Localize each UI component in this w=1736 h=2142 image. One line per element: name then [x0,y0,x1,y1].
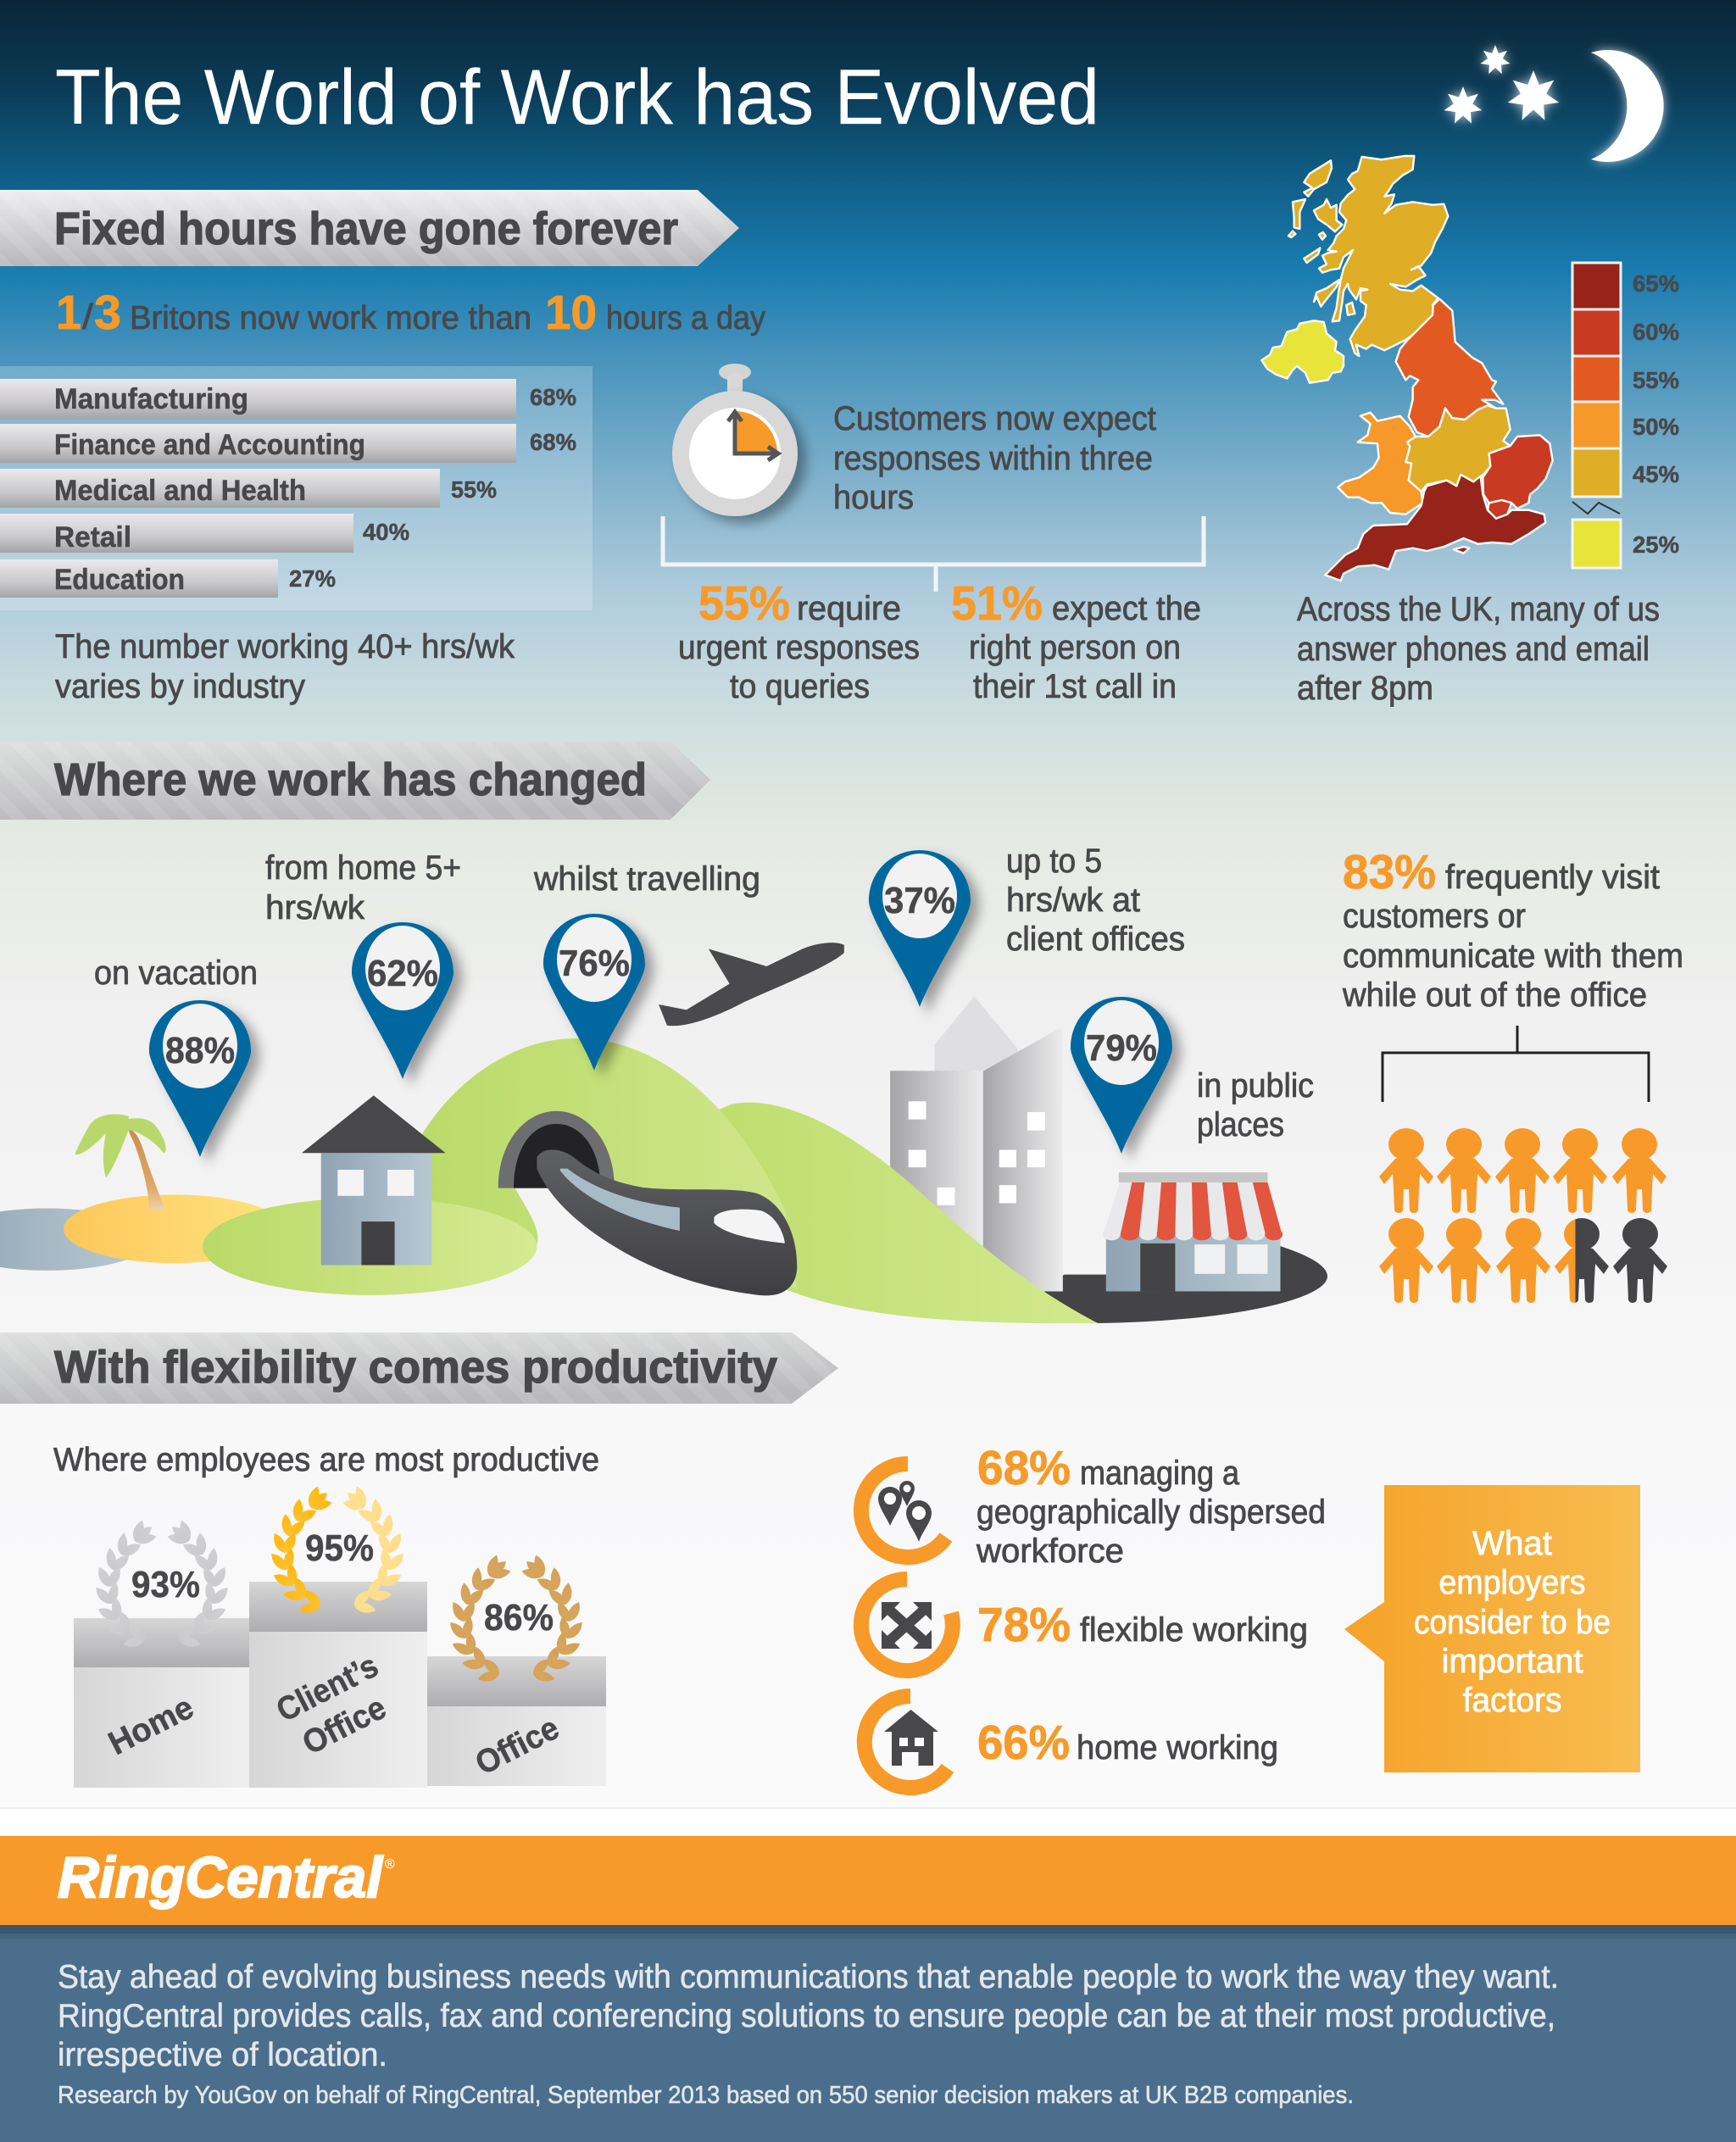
footer copy panel: Research by YouGov on behalf of RingCentral, September 2013 based on 550 senior decision makers at UK B2B companies. [58,2082,1354,2109]
factor: home working: home working [1077,1729,1278,1766]
bar: manufacturing [0,379,576,419]
stat line: one third of Britons [56,286,765,340]
text: chart caption: varies by industry [55,668,305,705]
pin: public places 79 percent: 79% [1086,1027,1157,1069]
stat: 55 percent urgent responses [678,576,920,705]
wreath: silver [92,1519,231,1649]
text: chart caption: The number working 40+ hrs/wk [55,628,515,665]
value: client's office 95 percent: 95% [305,1527,374,1569]
stat line: one third of Britons: 1 [56,286,81,340]
podium label: home: Home [103,1689,199,1762]
factor: dispersed workforce: workforce [976,1533,1124,1570]
text: customers expect: hours [833,479,914,516]
factor: dispersed workforce: geographically dispersed [976,1494,1326,1531]
footer copy panel: irrespective of location. [58,2037,387,2073]
factor: flexible working: 78% [977,1598,1071,1652]
section banner: flexibility [0,1332,838,1404]
bar: retail: Retail [54,521,131,554]
logo band: ® [385,1857,395,1872]
stat line: one third of Britons: 10 [545,286,597,340]
icon: stars and moon [1444,45,1664,162]
stat: 83 percent visit customers [1342,845,1683,1014]
footer copy panel [0,1925,1736,2142]
pictogram: ten people, eight and a half orange [1379,1128,1667,1303]
stat: 83 percent visit customers: customers or [1343,898,1526,935]
region: South of England [1325,475,1545,581]
callout: what employers consider important: factors [1463,1682,1561,1719]
label: public places: in public [1197,1067,1314,1104]
section banner: flexibility: With flexibility comes productivity [54,1342,777,1393]
stat: 83 percent visit customers: frequently visit [1445,859,1660,896]
pin: whilst travelling 76 percent [543,914,645,1071]
bar: education: 27% [289,565,336,592]
icon: ring with expanding arrows [861,1579,953,1671]
label: public places [1197,1067,1314,1143]
icon: ring with house [865,1696,948,1788]
wreath: gold [268,1485,407,1615]
region: Scotland [1288,156,1448,356]
bar: manufacturing: 68% [530,384,576,410]
pin: client offices 37 percent: 37% [884,880,955,921]
text: customers expect: Customers now expect [833,400,1156,437]
region: Northern Ireland [1261,320,1344,383]
podium label: client's office [271,1648,392,1762]
section banner: where we work [0,742,710,820]
podium label: client's office: Office [297,1689,392,1762]
callout: what employers consider important: What [1472,1525,1552,1562]
pin: whilst travelling 76 percent: 76% [559,943,630,984]
stat: 51 percent right person: their 1st call in [973,668,1177,705]
factor: dispersed workforce [861,1441,1326,1570]
factor: flexible working [861,1579,1308,1671]
section banner: fixed hours: Fixed hours have gone forever [54,203,678,254]
text: across the UK [1297,591,1660,707]
bar: medical: Medical and Health [54,475,306,507]
bar: finance: 68% [530,429,576,455]
panel: hours by industry bar chart [0,366,593,610]
map legend: 65% [1633,270,1679,297]
pin: client offices 37 percent [869,850,971,1007]
callout: what employers consider important [1344,1485,1640,1772]
callout: what employers consider important: consider to be [1414,1604,1611,1641]
icon: palm tree [75,1114,166,1210]
scene: front hill [398,1038,797,1289]
pin: on vacation 88 percent [149,1000,251,1157]
label: client offices: client offices [1006,921,1185,958]
map legend: 50% [1633,414,1679,440]
label: from home: hrs/wk [265,889,365,926]
bar: education [0,559,336,598]
factor: home working [865,1696,1278,1788]
callout: what employers consider important: important [1441,1643,1583,1680]
factor: dispersed workforce: 68% [977,1441,1071,1495]
factor: home working: 66% [977,1716,1070,1770]
stat: 51 percent right person: expect the [1052,590,1201,627]
bar: medical: 55% [451,476,497,503]
label: whilst travelling: whilst travelling [533,860,760,898]
map legend: 55% [1633,367,1679,393]
label: client offices: up to 5 [1006,843,1102,880]
text: across the UK: Across the UK, many of us [1297,591,1660,628]
footer copy panel: RingCentral provides calls, fax and conferencing solutions to ensure people can be at their most productive, [58,1998,1555,2034]
bar: medical [0,469,497,508]
bar: finance [0,424,576,463]
label: client offices [1006,843,1185,958]
label: from home: from home 5+ [265,849,461,887]
value: home 93 percent: 93% [131,1564,200,1605]
bracket [663,516,1204,592]
bar: retail [0,514,409,554]
bar: manufacturing: Manufacturing [54,383,248,415]
label: from home [265,849,461,926]
footer copy panel: Stay ahead of evolving business needs with communications that enable people to work the way they want. [58,1959,1559,1995]
map legend: 45% [1633,461,1679,487]
stat: 55 percent urgent responses: 55% [698,576,790,631]
factor: dispersed workforce: managing a [1080,1455,1240,1492]
label: on vacation: on vacation [94,954,258,992]
region: London [1488,500,1511,519]
factor: flexible working: flexible working [1080,1611,1308,1649]
map legend: 25% [1633,531,1679,558]
text: customers expect [833,400,1156,516]
stat line: one third of Britons: Britons now work more than [130,300,531,337]
stat line: one third of Britons: hours a day [606,300,765,337]
region: Midlands [1405,405,1511,492]
section banner: fixed hours [0,190,739,266]
UK map [1261,156,1553,581]
location scene [0,996,1327,1323]
icon: airplane [659,943,844,1026]
bar: finance: Finance and Accounting [54,429,365,461]
scene: office buildings and shop [890,996,1327,1323]
scene: water and beach island [0,1194,285,1271]
title: The World of Work has Evolved [55,54,1099,141]
section banner: where we work: Where we work has changed [54,754,647,805]
text: customers expect: responses within three [833,440,1153,477]
stat: 83 percent visit customers: communicate with them [1343,937,1683,975]
callout: what employers consider important: employers [1439,1564,1585,1601]
scene: house on green island [203,1095,537,1295]
text: across the UK: answer phones and email [1297,631,1650,668]
heading: where employees are most productive: Where employees are most productive [53,1442,599,1478]
pin: from home 62 percent: 62% [367,953,438,994]
stat: 51 percent right person: 51% [951,576,1043,631]
stat: 51 percent right person [951,576,1201,705]
scene: back hill [678,1103,1098,1323]
icon: ring with location pins [861,1464,946,1557]
podium [74,1582,606,1788]
pin: on vacation 88 percent: 88% [165,1030,235,1071]
region: Wales [1338,413,1422,515]
region: East of England [1483,435,1553,509]
podium label: client's office: Client’s [271,1648,384,1729]
podium label: office: Office [470,1710,565,1783]
stat: 55 percent urgent responses: urgent responses [678,629,920,666]
region: Northern England [1396,299,1503,437]
stat: 83 percent visit customers: 83% [1343,845,1436,899]
text: chart caption [55,628,515,705]
stat: 55 percent urgent responses: to queries [730,668,870,705]
scene: tunnel and train [498,1111,797,1295]
stat line: one third of Britons: 3 [94,286,121,340]
footer white strip [0,1808,1736,1836]
stat: 83 percent visit customers: while out of the office [1342,976,1647,1014]
stat line: one third of Britons: / [82,297,93,337]
bracket over people [1383,1026,1649,1102]
value: office 86 percent: 86% [484,1597,554,1638]
pin: from home 62 percent [352,922,453,1079]
logo band: RingCentral [58,1845,384,1910]
wreath: bronze [447,1554,586,1683]
map legend [1572,263,1679,568]
icon: stopwatch [672,364,798,516]
pin: public places 79 percent [1071,997,1172,1154]
map legend: 60% [1633,319,1679,345]
logo band [0,1836,1736,1925]
stat: 51 percent right person: right person on [969,629,1181,666]
bar: education: Education [54,564,185,596]
bar: retail: 40% [363,519,409,545]
label: client offices: hrs/wk at [1006,882,1140,919]
label: public places: places [1197,1106,1284,1143]
stat: 55 percent urgent responses: require [797,590,901,627]
text: across the UK: after 8pm [1297,670,1433,707]
